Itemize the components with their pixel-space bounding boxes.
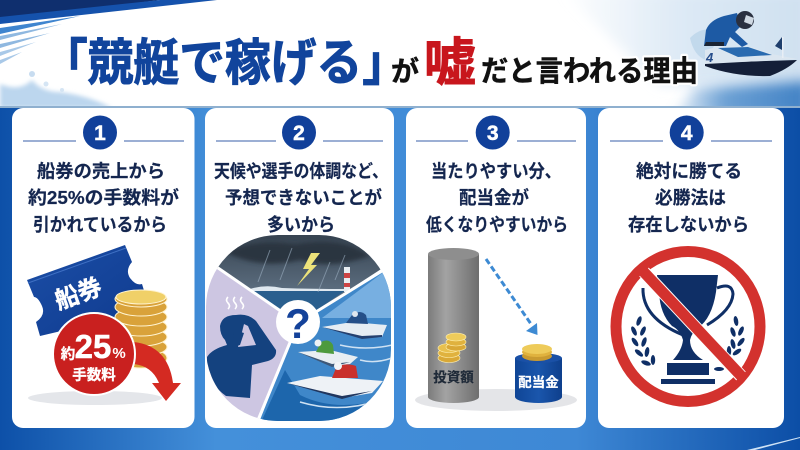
- panel: card 4: [598, 108, 784, 428]
- title: だと言われる理由: [481, 55, 698, 88]
- number badge 4: [670, 116, 704, 150]
- panel: card 2: [205, 108, 395, 428]
- title: [42, 35, 698, 93]
- callout: 25% fee: 25: [75, 328, 111, 365]
- number badge 4: 4: [681, 122, 693, 145]
- heading 1: 船券の売上から: [37, 162, 165, 182]
- pie illustration: [205, 230, 395, 425]
- heading 4: [628, 162, 749, 235]
- heading 1: 約25%の手数料が: [28, 187, 179, 208]
- laurels: [630, 316, 746, 371]
- heading 3: 配当金が: [459, 187, 529, 208]
- header background: [0, 0, 800, 106]
- heading 3: 低くなりやすいから: [426, 215, 568, 235]
- shadow: [415, 389, 577, 411]
- heading 3: 当たりやすい分、: [431, 162, 561, 182]
- title: 「競艇で稼げる」: [42, 35, 408, 91]
- heading 2: 多いから: [267, 214, 335, 235]
- number badge 1: 1: [94, 122, 106, 145]
- number badge 2: [282, 116, 316, 150]
- dividers: [217, 266, 382, 418]
- heading 1: 引かれているから: [33, 215, 167, 235]
- icon: boat racer: 4: [705, 50, 714, 65]
- title: 「競艇で稼げる」: [42, 35, 408, 91]
- bar: payout: [515, 344, 562, 403]
- heading 3: [426, 162, 568, 235]
- callout: 25% fee: 手数料: [72, 366, 116, 384]
- number badge 3: 3: [487, 122, 499, 145]
- icon: question mark: ?: [285, 300, 311, 347]
- sector: worried person: [206, 268, 288, 418]
- heading 2: 予想できないことが: [225, 187, 382, 208]
- callout: 25% fee: 約: [61, 346, 75, 363]
- boat middle: [298, 340, 358, 367]
- title: だと言われる理由: [481, 55, 698, 88]
- icon: ticket: [27, 245, 150, 336]
- heading 4: 必勝法は: [655, 188, 726, 208]
- number badge 3: [476, 116, 510, 150]
- heading 4: 絶対に勝てる: [636, 162, 742, 182]
- heading 1: [28, 162, 179, 235]
- hull: [705, 60, 797, 76]
- lower blue background: [0, 106, 800, 450]
- shadow: [28, 391, 162, 405]
- callout: 25% fee: [53, 313, 135, 395]
- icon: trophy with prohibition sign: [616, 252, 760, 402]
- arrow: dashed down: [486, 259, 538, 335]
- heading 2: 天候や選手の体調など、: [214, 162, 388, 182]
- icon: boat racer: [690, 11, 797, 76]
- sector: storm: [218, 235, 380, 310]
- bar: investment: 投資額: [433, 369, 474, 385]
- bar: investment: [428, 248, 479, 403]
- title: 嘘: [424, 35, 476, 93]
- number badge 1: [83, 116, 117, 150]
- bar: payout: 配当金: [518, 374, 559, 390]
- arrow: red down: [134, 342, 181, 401]
- trophy: [630, 275, 746, 384]
- rider: [704, 13, 748, 47]
- icon: question mark: [276, 300, 320, 347]
- sector: boats: [258, 270, 395, 425]
- callout: 25% fee: %: [112, 345, 126, 362]
- prohibition sign: [616, 252, 760, 402]
- panel: card 3: [406, 108, 586, 428]
- icon: ticket: 船券: [51, 274, 106, 315]
- panel: card 1: [12, 108, 194, 428]
- heading 2: [214, 162, 388, 235]
- boat top: [322, 311, 387, 339]
- title: が: [391, 55, 419, 87]
- boat bottom: [287, 362, 383, 399]
- number badge 2: 2: [293, 122, 305, 145]
- icon: coins: [115, 290, 167, 368]
- heading 4: 存在しないから: [628, 215, 749, 235]
